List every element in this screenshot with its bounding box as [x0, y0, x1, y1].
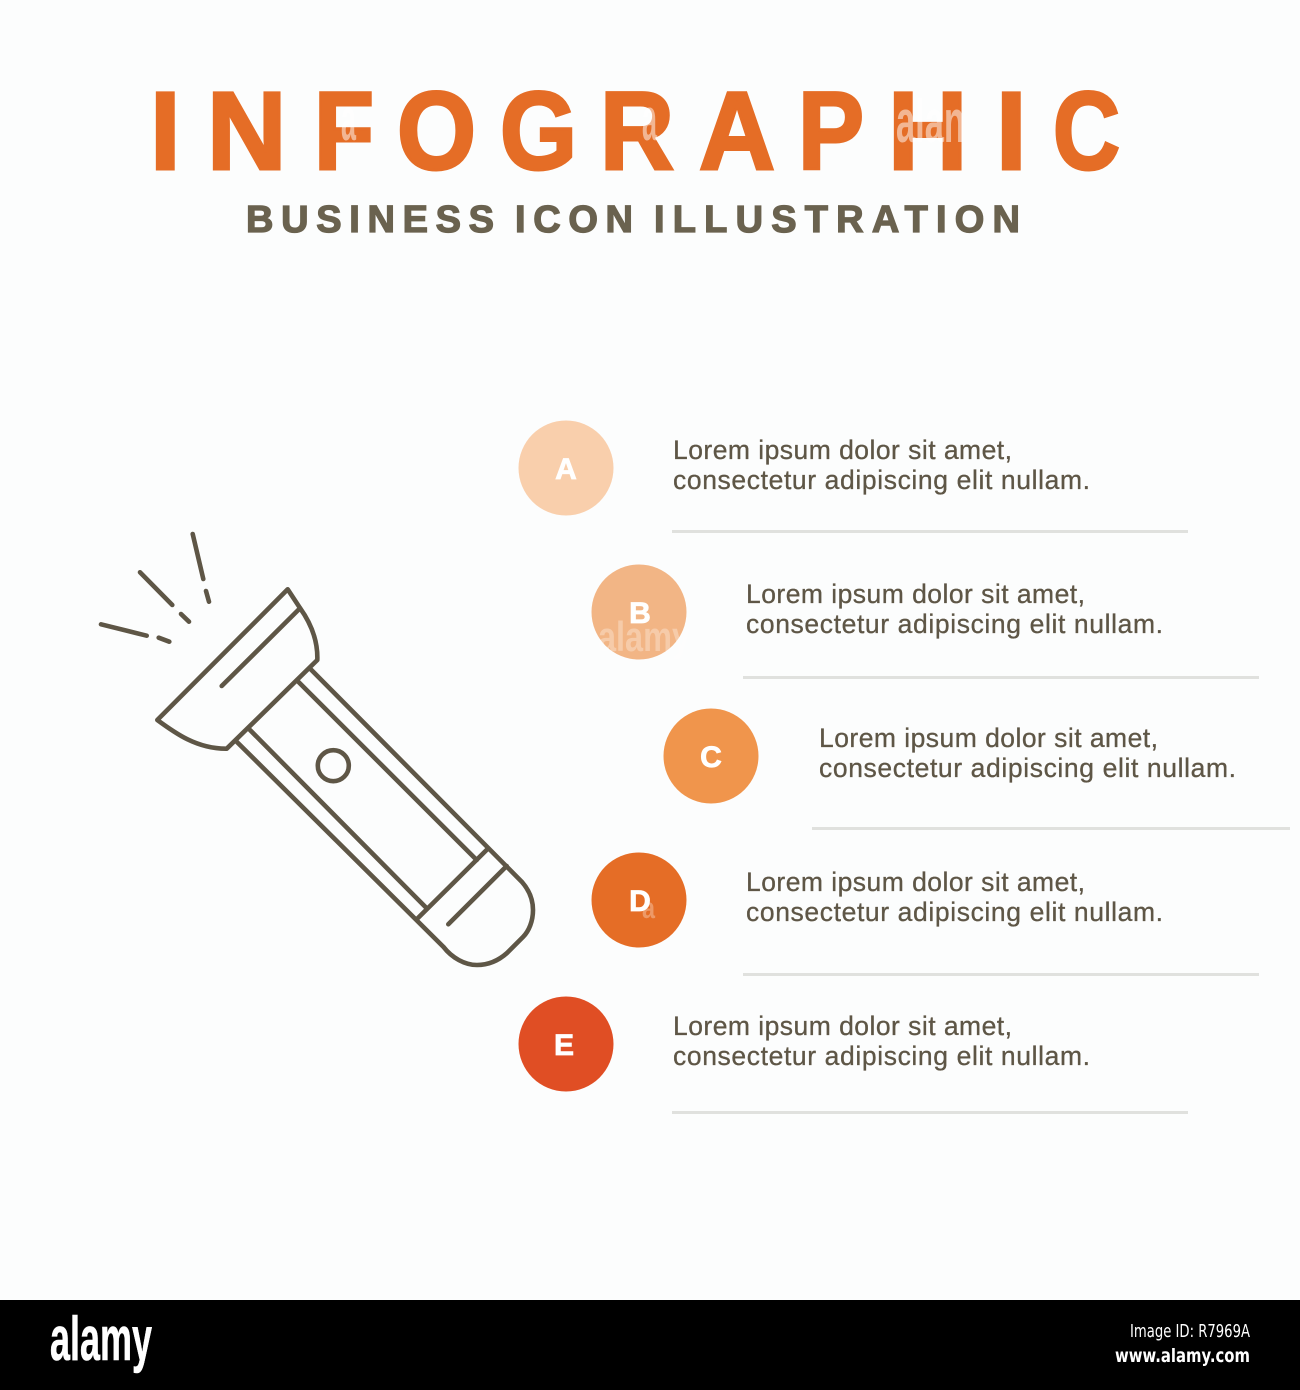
- title: I: [996, 70, 1027, 193]
- step C: [664, 708, 1290, 830]
- title: C: [1053, 70, 1120, 193]
- head highlight line: [222, 608, 300, 686]
- website: www.alamy.com: [1115, 1345, 1250, 1367]
- icon: flashlight: [101, 534, 533, 965]
- step E: Lorem ipsum dolor sit amet,: [673, 1011, 1012, 1041]
- step D: [592, 852, 1259, 976]
- step B: Lorem ipsum dolor sit amet,: [746, 579, 1085, 609]
- step A: consectetur adipiscing elit nullam.: [673, 465, 1090, 495]
- step E: consectetur adipiscing elit nullam.: [673, 1041, 1090, 1071]
- title: a: [341, 86, 356, 153]
- step D: consectetur adipiscing elit nullam.: [746, 897, 1163, 927]
- step D: D: [629, 885, 651, 918]
- step B: B: [629, 597, 651, 630]
- title: R: [600, 70, 674, 193]
- title: [150, 70, 1120, 193]
- footer bar: [0, 1300, 1300, 1390]
- title: N: [207, 70, 286, 193]
- flashlight body: [237, 669, 533, 965]
- step C: Lorem ipsum dolor sit amet,: [819, 723, 1158, 753]
- title: G: [500, 70, 577, 193]
- step C: consectetur adipiscing elit nullam.: [819, 753, 1236, 783]
- step A: Lorem ipsum dolor sit amet,: [673, 435, 1012, 465]
- title: I: [150, 70, 181, 193]
- footer logo: alamy: [50, 1305, 152, 1374]
- step D: a: [642, 892, 655, 925]
- image id: Image ID: R7969A: [1130, 1321, 1250, 1342]
- flashlight button: [318, 750, 349, 781]
- body end bands: [417, 848, 507, 924]
- step B: consectetur adipiscing elit nullam.: [746, 609, 1163, 639]
- step E: E: [554, 1029, 574, 1062]
- subtitle: BUSINESS: [246, 199, 494, 241]
- subtitle: ILLUSTRATION: [654, 199, 1020, 241]
- light rays: [101, 534, 209, 642]
- step B: alamy: [598, 613, 690, 660]
- step D: Lorem ipsum dolor sit amet,: [746, 867, 1085, 897]
- title: alan: [896, 88, 965, 155]
- step A: A: [555, 453, 577, 486]
- step A: [518, 420, 1188, 533]
- title: P: [798, 70, 864, 193]
- flashlight head: [157, 589, 317, 749]
- title: H: [888, 70, 967, 193]
- step E: [518, 996, 1188, 1114]
- subtitle: ICON: [515, 199, 633, 241]
- step B: [592, 564, 1259, 679]
- body inner lines: [250, 682, 477, 908]
- title: A: [699, 70, 775, 193]
- title: F: [314, 70, 374, 193]
- title: a: [642, 86, 657, 153]
- title: O: [397, 70, 476, 193]
- step C: C: [700, 741, 722, 774]
